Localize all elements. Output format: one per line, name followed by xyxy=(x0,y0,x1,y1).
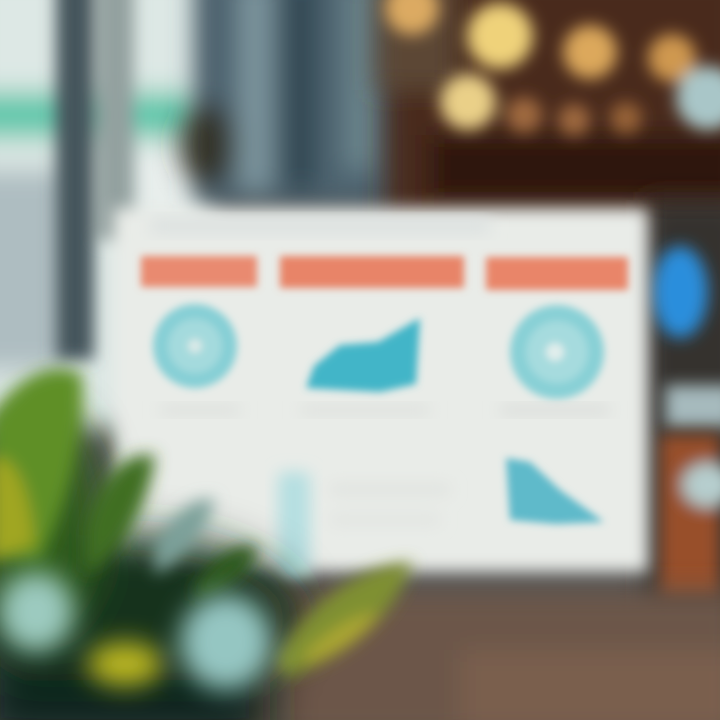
table xyxy=(240,590,720,720)
plant xyxy=(0,369,412,720)
chart: lower center bar xyxy=(278,472,310,577)
text block: lower center lines xyxy=(330,485,450,524)
plant leaves xyxy=(0,369,412,678)
chart: center area shape xyxy=(306,318,420,392)
poster title xyxy=(150,218,490,234)
background: brown ceiling xyxy=(375,0,720,220)
right side shelf xyxy=(645,200,720,620)
icon: right ring chart xyxy=(510,305,604,399)
poster sheet xyxy=(114,208,648,572)
bokeh ceiling lights xyxy=(385,0,720,136)
icon: left ring chart xyxy=(153,304,237,388)
chart: lower right area shape xyxy=(506,458,604,524)
pillar xyxy=(56,0,134,360)
text block: captions under charts xyxy=(160,405,610,415)
red header bars xyxy=(141,256,628,290)
poster xyxy=(114,208,648,577)
plant dark mass xyxy=(0,410,300,720)
background: dark upper middle interior xyxy=(180,0,415,205)
pale band on the right xyxy=(665,385,720,427)
plant pale leaves and yellow spot xyxy=(0,572,272,690)
blue object on the right xyxy=(652,246,708,338)
orange-brown object on the right xyxy=(660,435,720,600)
background: left window xyxy=(0,0,210,430)
